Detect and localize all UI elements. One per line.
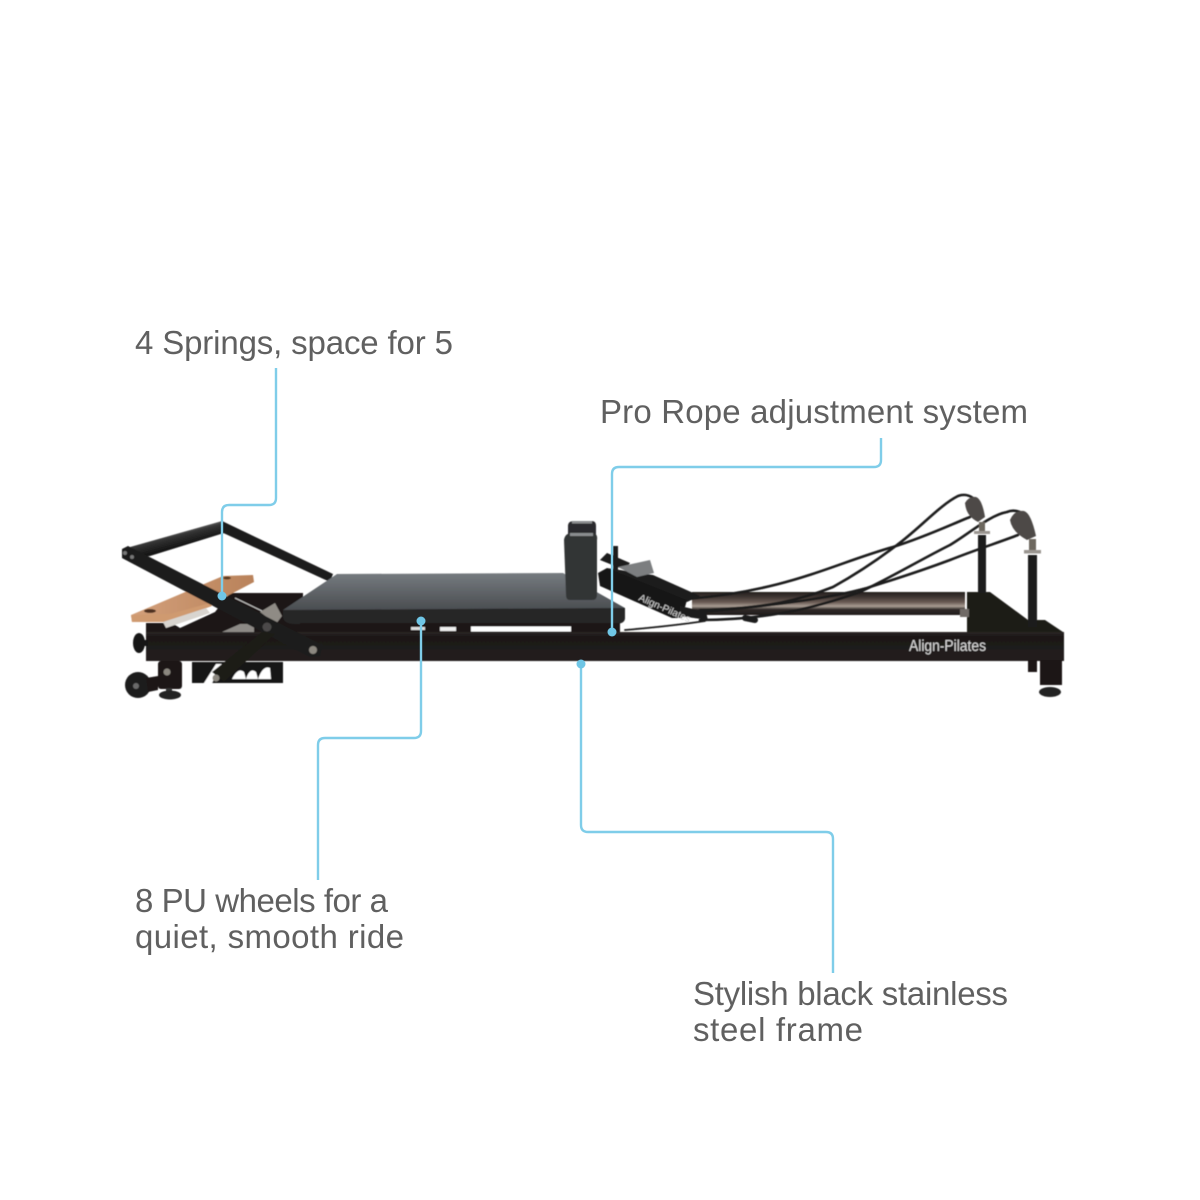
callout: frame: Stylish black stainless — [693, 975, 1008, 1012]
main frame beam — [146, 632, 1064, 661]
callout: frame: steel frame — [693, 1011, 863, 1048]
reformer machine — [122, 495, 1064, 700]
callout: springs: 4 Springs, space for 5 — [135, 324, 453, 361]
callout: springs — [135, 324, 453, 600]
gear bracket — [192, 662, 283, 683]
callout: rope system: Pro Rope adjustment system — [600, 393, 1028, 430]
wooden plate — [131, 575, 254, 628]
rear foot — [1028, 660, 1062, 697]
spring bay — [146, 593, 303, 632]
footbar back arm — [219, 521, 333, 582]
far rail — [692, 592, 1063, 632]
front wheel and foot — [125, 633, 182, 700]
callout: rope system — [600, 393, 1028, 636]
callout: wheels: 8 PU wheels for a — [135, 882, 389, 919]
frame logo: Align-Pilates — [909, 638, 986, 655]
callout: wheels: quiet, smooth ride — [135, 918, 404, 955]
pulley posts — [965, 497, 1041, 627]
rope cleats and straps: Align-Pilates — [637, 593, 692, 625]
callout: wheels — [135, 616, 426, 955]
footbar handle — [130, 521, 224, 558]
rope cleats and straps — [598, 546, 708, 625]
callout: frame — [576, 660, 1008, 1048]
shoulder rests — [564, 521, 597, 600]
ropes — [625, 495, 1022, 630]
carriage pad — [283, 573, 625, 632]
footbar front arm — [122, 546, 322, 682]
